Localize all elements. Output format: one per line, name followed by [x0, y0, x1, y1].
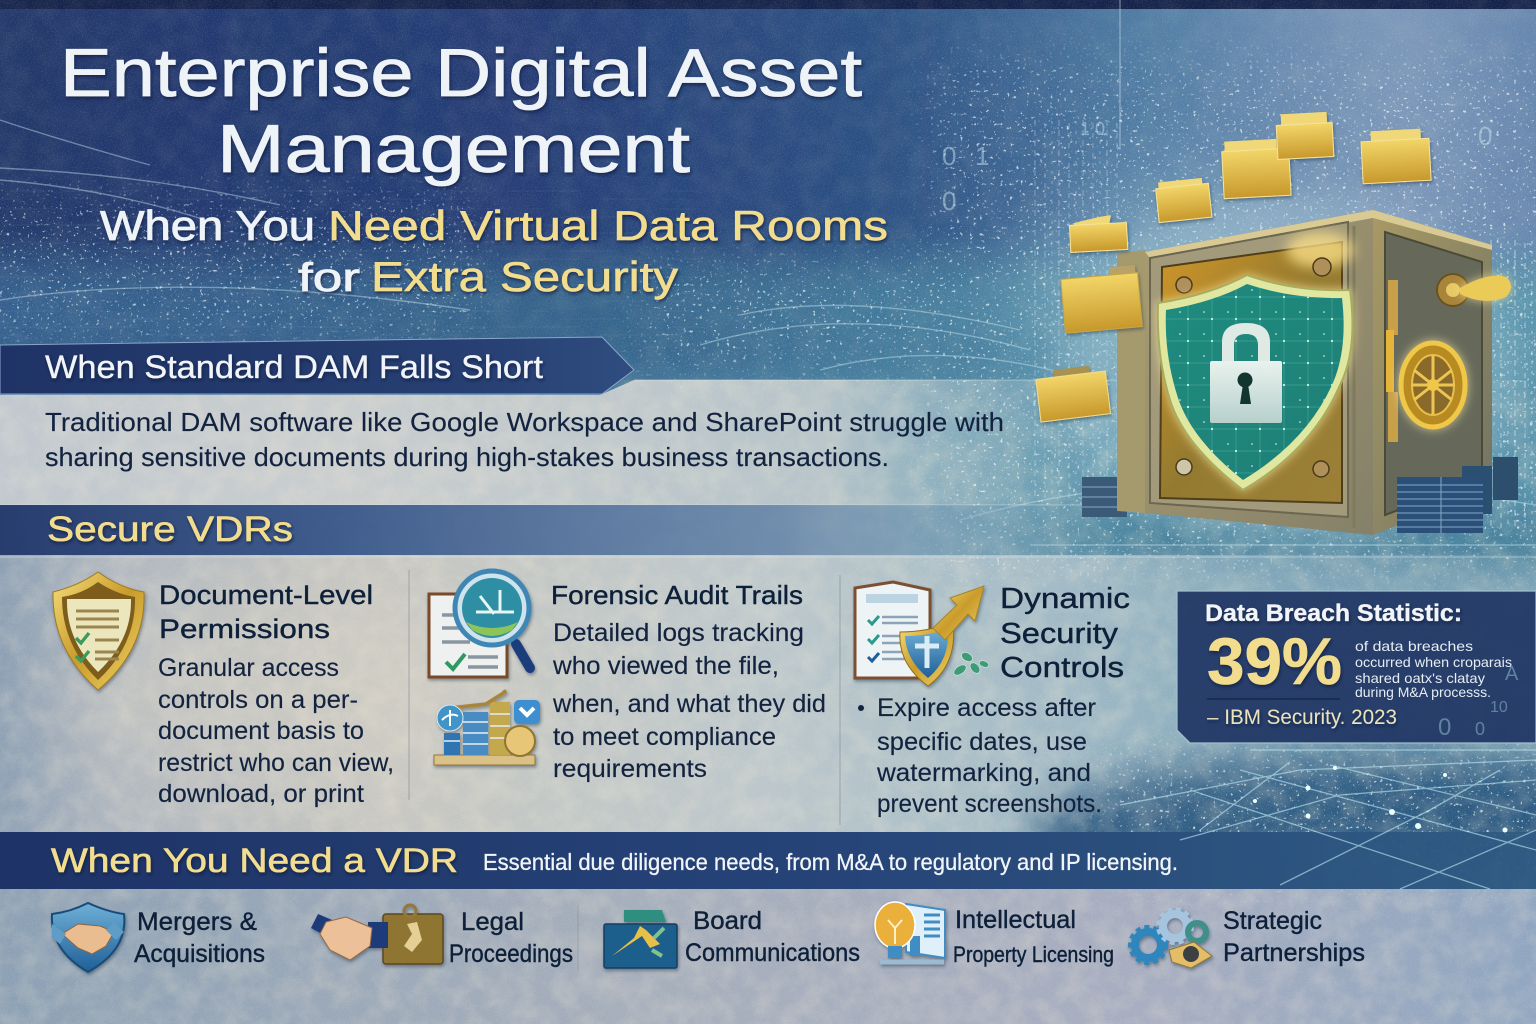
panel: data breach statistic: 10	[1490, 699, 1508, 716]
heading	[1000, 583, 1130, 684]
label	[685, 907, 860, 967]
icon: data bars with chart line	[434, 690, 540, 765]
title: Management	[217, 111, 690, 187]
body text	[158, 654, 394, 808]
stat description	[1355, 638, 1512, 700]
section band: when you need a VDR: Essential due diligence needs, from M&A to regulatory and IP licensing.	[483, 849, 1178, 875]
hero illustration: secure vault with shield and folders	[1035, 112, 1520, 550]
heading: Dynamic	[1000, 583, 1130, 615]
body text: controls on a per-	[158, 686, 358, 714]
icon: handshake shield	[52, 903, 124, 972]
use case: legal proceedings	[311, 905, 573, 968]
bullet text	[858, 694, 1102, 818]
heading	[159, 580, 373, 644]
label	[134, 908, 265, 968]
background: 0	[942, 141, 956, 171]
panel: data breach statistic: 0	[1475, 719, 1485, 739]
body text: when, and what they did	[552, 690, 826, 718]
use case: intellectual property licensing	[875, 902, 1114, 967]
banner: when standard DAM falls short	[0, 337, 634, 394]
panel: data breach statistic: A	[1505, 663, 1519, 685]
use case: strategic partnerships	[1130, 907, 1365, 968]
intro text: sharing sensitive documents during high-stakes business transactions.	[45, 442, 889, 472]
body text: Granular access	[158, 654, 339, 682]
use case: board communications	[604, 907, 860, 968]
vault handle	[1437, 274, 1511, 306]
icon: gears	[1130, 909, 1212, 968]
vault body	[1117, 210, 1492, 535]
label: Communications	[685, 939, 860, 967]
body text	[552, 619, 826, 783]
stat description: of data breaches	[1355, 638, 1473, 654]
body text: requirements	[553, 755, 707, 783]
heading: Forensic Audit Trails	[551, 580, 803, 610]
stat description: during M&A processs.	[1355, 684, 1491, 700]
folder	[1276, 112, 1334, 159]
folder	[1060, 265, 1142, 333]
folder	[1069, 215, 1128, 252]
background: 0	[1478, 121, 1492, 151]
label: Mergers &	[137, 908, 257, 936]
use case: mergers and acquisitions	[52, 903, 265, 972]
label: Property Licensing	[953, 942, 1114, 967]
title	[60, 35, 862, 187]
icon: handshake and briefcase	[311, 905, 443, 964]
heading: Document-Level	[159, 580, 373, 610]
icon: teal folder with star	[604, 910, 677, 968]
label	[1223, 907, 1365, 967]
vault bolts	[1176, 258, 1331, 477]
label: Acquisitions	[134, 940, 265, 968]
panel: forensic audit trails	[429, 571, 826, 783]
stat description: shared oatx's clatay	[1355, 670, 1485, 686]
body text: to meet compliance	[553, 723, 776, 751]
folder	[1035, 364, 1111, 422]
subtitle: Need Virtual Data Rooms	[328, 202, 888, 249]
label	[953, 906, 1114, 967]
body text: restrict who can view,	[158, 749, 394, 777]
icon: light bulb and monitor	[875, 902, 945, 962]
label: Proceedings	[449, 940, 573, 968]
subtitle: When You	[100, 202, 315, 249]
folder	[1221, 138, 1291, 199]
label: Partnerships	[1223, 939, 1365, 967]
icon: gold shield with checklist	[53, 572, 144, 690]
label	[449, 908, 573, 968]
subtitle: for	[298, 256, 360, 300]
background: 1 0	[1080, 119, 1105, 139]
vault dial	[1401, 343, 1465, 427]
intro text	[45, 407, 1004, 472]
icon: document and magnifier	[429, 571, 530, 677]
label: Board	[693, 907, 762, 935]
label: Strategic	[1223, 907, 1322, 935]
rear server racks	[1082, 457, 1518, 517]
label: Legal	[461, 908, 524, 936]
section band: when you need a VDR: When You Need a VDR	[51, 842, 458, 880]
body text: Detailed logs tracking	[553, 619, 804, 647]
bullet text: Expire access after	[877, 694, 1096, 722]
body text: who viewed the file,	[552, 652, 779, 680]
stat number: 39%	[1207, 624, 1342, 698]
subtitle	[100, 202, 888, 300]
panel: data breach statistic: 0	[1438, 714, 1451, 741]
intro text: Traditional DAM software like Google Workspace and SharePoint struggle with	[45, 407, 1004, 437]
panel: data breach statistic	[1177, 591, 1536, 743]
banner: when standard DAM falls short: When Standard DAM Falls Short	[45, 349, 543, 385]
background: 1	[975, 141, 989, 171]
section band: secure VDRs	[0, 505, 1110, 555]
bullet text: specific dates, use	[877, 728, 1087, 756]
shield with padlock	[1158, 275, 1352, 490]
subtitle: Extra Security	[371, 253, 678, 300]
title: Enterprise Digital Asset	[60, 35, 862, 111]
section band: when you need a VDR	[0, 832, 1536, 889]
flying folders	[1035, 112, 1431, 422]
heading: Permissions	[159, 614, 330, 644]
label: Intellectual	[955, 906, 1076, 934]
heading: Security	[1000, 618, 1119, 650]
panel: dynamic security controls	[855, 582, 1130, 818]
panel: document-level permissions	[53, 572, 394, 808]
folder	[1360, 128, 1431, 184]
folder	[1155, 177, 1212, 223]
bullet text: watermarking, and	[876, 759, 1091, 787]
stat description: occurred when croparais	[1355, 654, 1512, 670]
bullet text: prevent screenshots.	[877, 790, 1102, 818]
stat source: – IBM Security. 2023	[1207, 706, 1397, 729]
background: 0	[942, 186, 956, 216]
section band: secure VDRs: Secure VDRs	[47, 510, 293, 549]
body text: document basis to	[158, 717, 364, 745]
stat heading: Data Breach Statistic:	[1205, 600, 1462, 627]
front server racks	[1397, 466, 1492, 533]
icon: checklist, shield and arrow	[855, 582, 984, 686]
icon: leaves	[952, 651, 990, 677]
body text: download, or print	[158, 780, 364, 808]
heading: Controls	[1000, 652, 1124, 684]
